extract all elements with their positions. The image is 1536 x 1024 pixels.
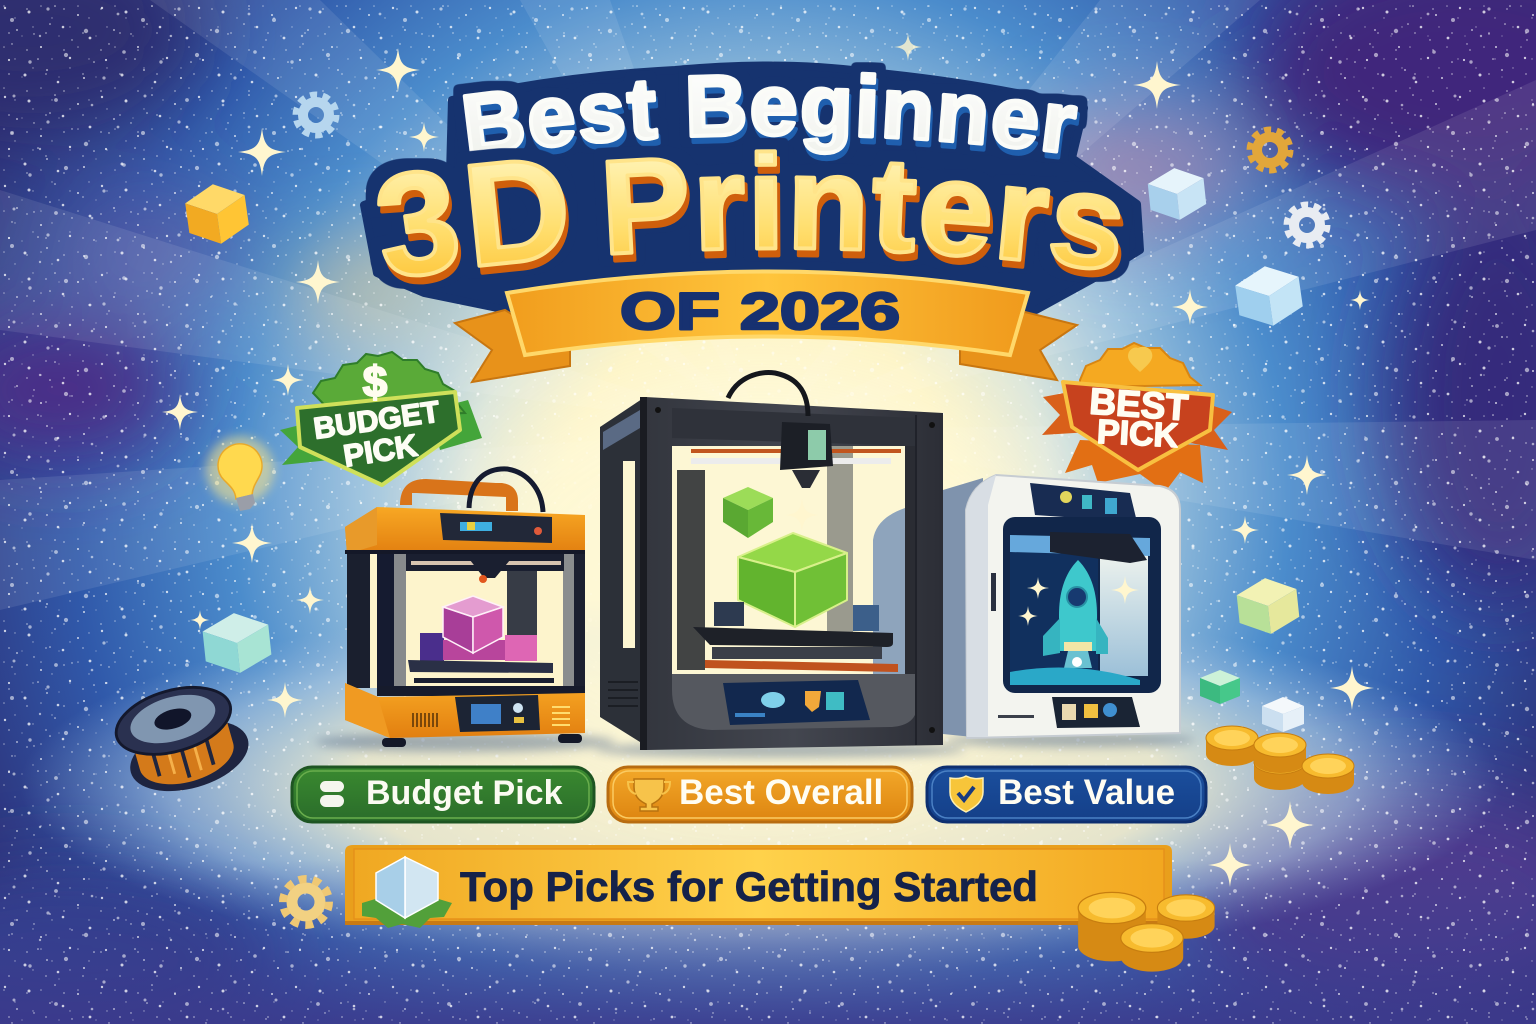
label: best value xyxy=(927,767,1206,822)
lower screen xyxy=(1052,697,1140,728)
badge text: PICK xyxy=(341,427,420,474)
icon: filament spool xyxy=(108,673,257,805)
dollar sign: $ xyxy=(363,358,387,407)
label text: Best Value xyxy=(998,773,1175,812)
base screen xyxy=(455,695,540,732)
icon: cube on leaves xyxy=(362,857,452,928)
cable xyxy=(728,373,808,416)
printer: black center xyxy=(600,373,943,750)
badge: budget pick xyxy=(280,352,482,485)
icon: right coin stacks xyxy=(1206,726,1354,794)
icon: gold cube xyxy=(183,180,251,248)
icon: green cube xyxy=(1200,670,1240,704)
label: budget pick xyxy=(292,767,594,822)
rays xyxy=(0,0,1536,610)
heading: 3D Printers: 3D Printers xyxy=(366,138,1130,289)
icon: blue cube xyxy=(1233,262,1305,330)
title xyxy=(360,62,1144,314)
base xyxy=(345,683,585,738)
ribbon: of 2026 xyxy=(455,272,1077,382)
icon: yellow green cube xyxy=(1235,575,1301,637)
print head xyxy=(780,422,833,470)
small green cube xyxy=(723,487,773,538)
build chamber xyxy=(672,446,917,674)
top housing xyxy=(345,507,585,554)
top beam xyxy=(672,408,917,446)
feet xyxy=(382,738,406,747)
big green cube xyxy=(738,533,847,627)
icon: light bulb xyxy=(206,436,274,511)
heading: Best Beginner: Best Beginner xyxy=(453,62,1088,162)
icon: gold gear xyxy=(1250,130,1290,170)
icon: white cube xyxy=(1262,697,1304,732)
badge: best pick xyxy=(1042,343,1232,492)
icon: trophy xyxy=(628,779,670,811)
bed xyxy=(1010,668,1140,685)
printer shadows xyxy=(315,732,1195,758)
top screen xyxy=(1030,483,1137,522)
icon: budget xyxy=(320,781,344,807)
printer: orange xyxy=(345,469,585,747)
rods and head xyxy=(1010,535,1150,556)
rods xyxy=(691,449,901,453)
bed xyxy=(693,627,893,647)
star xyxy=(785,498,819,532)
label text: Best Overall xyxy=(679,773,883,812)
banner text: Top Picks for Getting Started xyxy=(460,863,1038,910)
decorative sparkles xyxy=(162,33,1374,887)
icon: blue gear xyxy=(296,95,336,135)
badge text: BEST xyxy=(1088,381,1190,428)
base xyxy=(672,674,917,730)
top panel xyxy=(440,513,552,543)
icon: teal cube xyxy=(201,610,273,676)
control screen xyxy=(723,680,870,725)
pink prints xyxy=(420,596,537,661)
label text: Budget Pick xyxy=(366,774,563,812)
carry handle xyxy=(400,479,518,511)
supports xyxy=(714,602,744,626)
rocket xyxy=(1043,560,1108,668)
frame xyxy=(349,553,581,688)
icon: shield xyxy=(950,776,983,812)
icon: white gear xyxy=(1287,205,1327,245)
label: best overall xyxy=(608,767,912,822)
badge text: BUDGET xyxy=(312,395,442,446)
title backing plate xyxy=(364,65,1140,310)
printer: white xyxy=(943,475,1180,738)
ribbon text: OF 2026 xyxy=(620,283,900,341)
icon: bottom coins xyxy=(1078,892,1215,972)
bed xyxy=(408,660,553,673)
ground xyxy=(20,595,1500,975)
badge text: PICK xyxy=(1096,413,1180,455)
banner: top picks xyxy=(345,845,1172,928)
icon: cream gear xyxy=(283,879,329,925)
cable xyxy=(469,469,543,512)
icon: light blue cube xyxy=(1146,165,1208,223)
build window xyxy=(1003,517,1161,693)
